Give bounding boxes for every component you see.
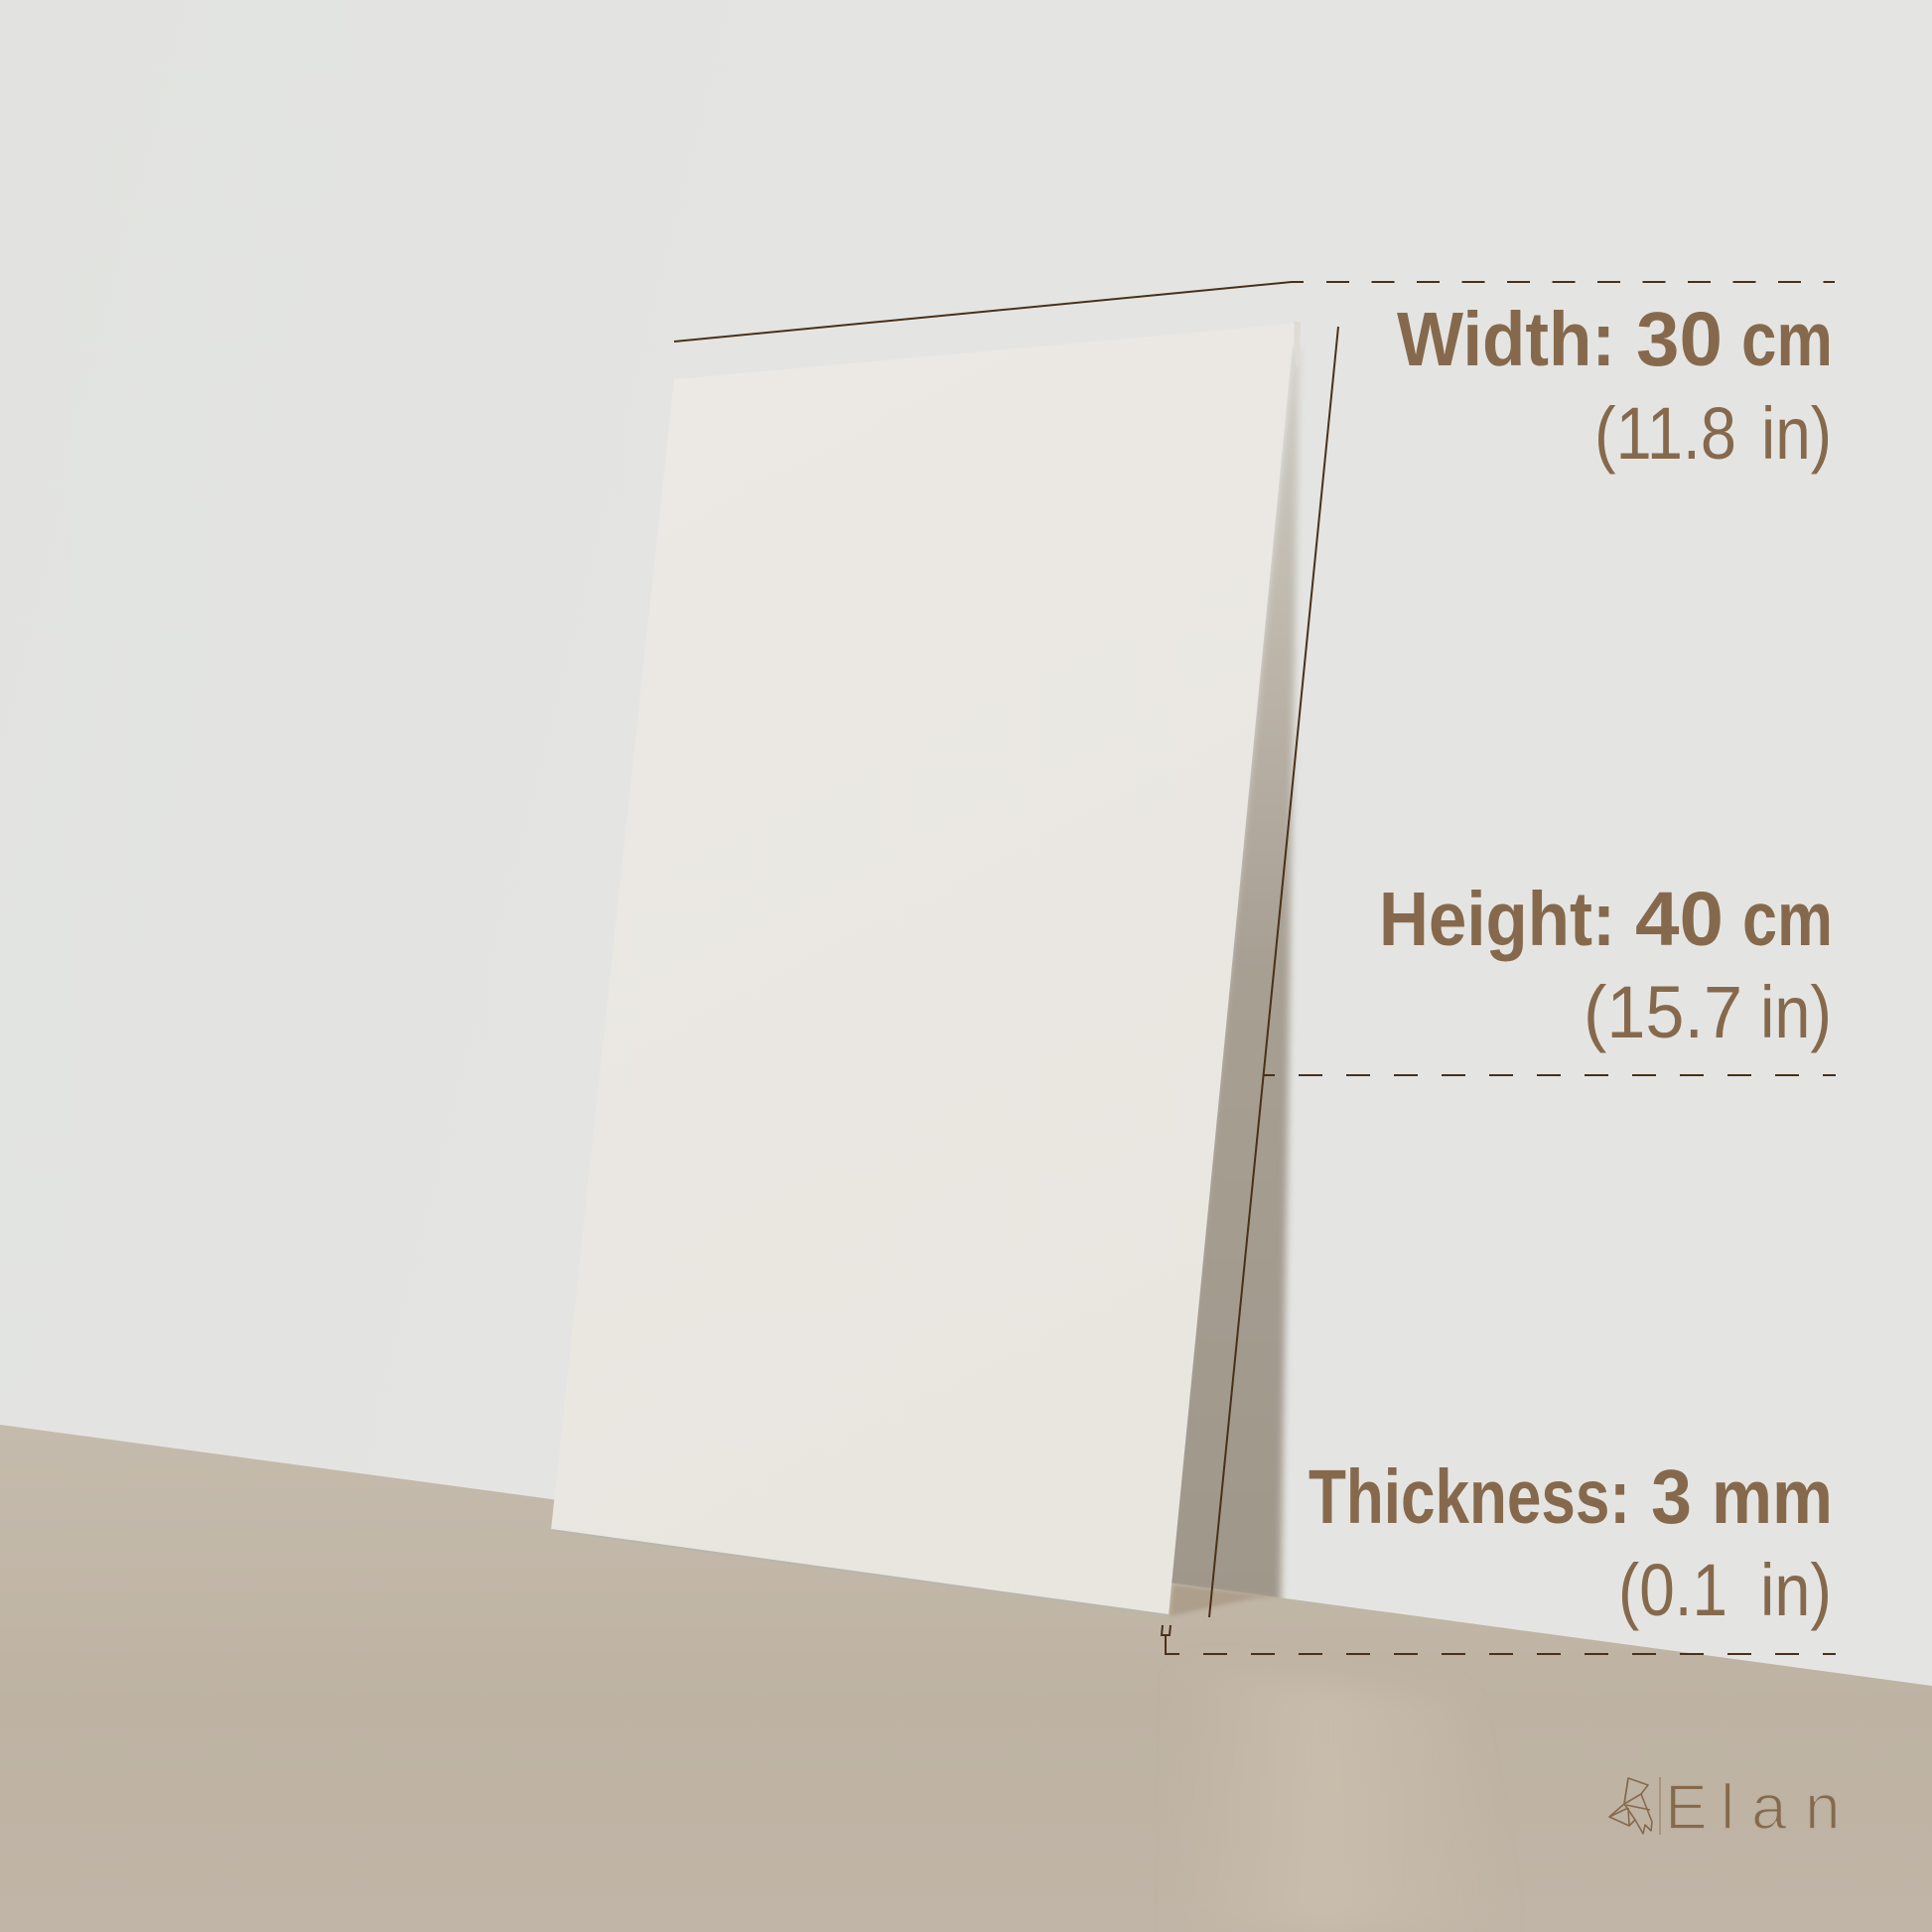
label: width: [1397, 297, 1833, 475]
label: thickness: in): [1760, 1549, 1832, 1631]
label: thickness: Thickness:: [1309, 1454, 1630, 1540]
floor: [0, 1425, 1932, 1932]
label: width: Width:: [1397, 297, 1615, 382]
label: height: Height:: [1379, 877, 1615, 962]
canvas shadow on floor: [1170, 1585, 1281, 1616]
canvas bottom edge: [551, 1530, 1169, 1615]
label: width: (11.8: [1594, 392, 1736, 475]
logo divider: [1659, 1777, 1661, 1835]
label: height: cm: [1742, 877, 1833, 962]
label: thickness: mm: [1712, 1454, 1833, 1540]
width measurement line: [674, 282, 1835, 342]
label: height: [1379, 877, 1833, 1053]
floor reflection: [1172, 1668, 1509, 1932]
label: height: 40: [1635, 877, 1724, 962]
label: thickness: (0.1: [1618, 1549, 1727, 1631]
icon: origami bird: [1609, 1778, 1652, 1834]
canvas shadow on wall: [1162, 347, 1300, 1608]
thickness measurement line: [1162, 1625, 1836, 1654]
label: thickness: [1309, 1454, 1833, 1631]
label: thickness: 3: [1651, 1454, 1692, 1540]
label: width: in): [1761, 392, 1832, 475]
label: width: 30: [1636, 297, 1723, 382]
label: width: cm: [1741, 297, 1833, 382]
canvas top corner edge: [1294, 321, 1301, 367]
label: height: in): [1760, 971, 1832, 1053]
height measurement line: [1209, 327, 1836, 1617]
canvas front face: [551, 324, 1295, 1615]
label: height: (15.7: [1584, 971, 1742, 1053]
logo wordmark: Elan: [1665, 1771, 1841, 1843]
logo: Elan: [1609, 1771, 1841, 1843]
